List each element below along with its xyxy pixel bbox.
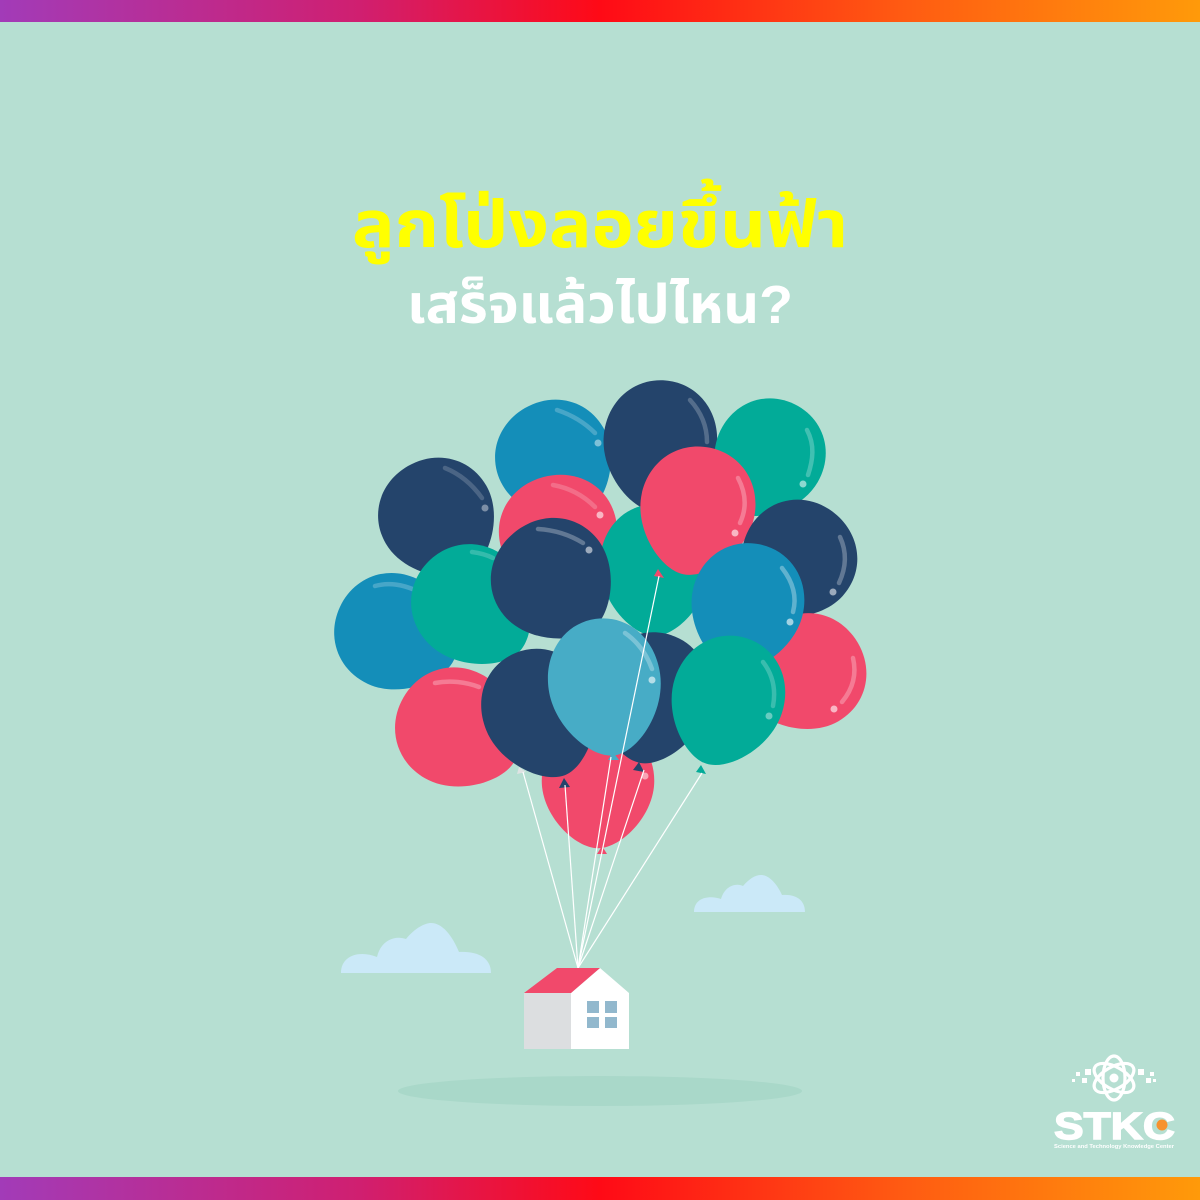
cloud left — [341, 923, 491, 973]
balloon: navy top — [598, 375, 722, 517]
balloon: green top right — [689, 378, 846, 539]
balloon: navy bottom right — [584, 623, 719, 773]
ground shadow — [398, 1076, 802, 1106]
title — [352, 178, 848, 335]
balloon: red top center — [627, 436, 766, 586]
balloon: navy top left — [358, 437, 519, 601]
house roof — [524, 968, 600, 993]
top gradient bar — [0, 0, 1200, 22]
balloon: green bottom — [653, 621, 801, 781]
balloon cluster — [315, 375, 887, 968]
house side wall — [524, 993, 571, 1049]
balloon: blue top — [475, 379, 636, 543]
balloon: blue right — [678, 533, 815, 681]
logo pixel squares — [1072, 1069, 1156, 1083]
knot: red top center — [654, 569, 664, 578]
balloon: navy bottom left — [464, 632, 617, 796]
balloon: navy right — [712, 477, 880, 645]
house — [524, 968, 629, 1049]
balloon: light blue — [540, 611, 670, 763]
logo orange dot — [1156, 1120, 1168, 1130]
house window — [587, 1001, 617, 1028]
title line 2: เสร็จแล้วไปไหน? — [407, 275, 793, 335]
logo: STKC — [1054, 1056, 1175, 1150]
bottom gradient bar — [0, 1177, 1200, 1200]
balloon: blue left — [315, 554, 478, 713]
title line 1: ลูกโป่งลอยขึ้นฟ้า — [352, 178, 848, 264]
balloon: green left — [387, 520, 560, 693]
knot: red left — [517, 767, 526, 774]
logo tagline: Science and Technology Knowledge Center — [1054, 1144, 1175, 1150]
balloon: red bottom — [542, 724, 654, 854]
balloon: green center — [600, 504, 710, 636]
house front wall — [571, 968, 629, 1049]
logo atom icon — [1089, 1056, 1139, 1100]
balloon: red right — [723, 593, 887, 754]
balloon: red left — [374, 646, 544, 813]
balloon strings — [523, 576, 702, 968]
logo wordmark: STKC — [1054, 1106, 1175, 1148]
balloon: red upper left — [486, 462, 632, 610]
cloud right — [694, 875, 805, 912]
balloon: navy center — [467, 494, 640, 667]
